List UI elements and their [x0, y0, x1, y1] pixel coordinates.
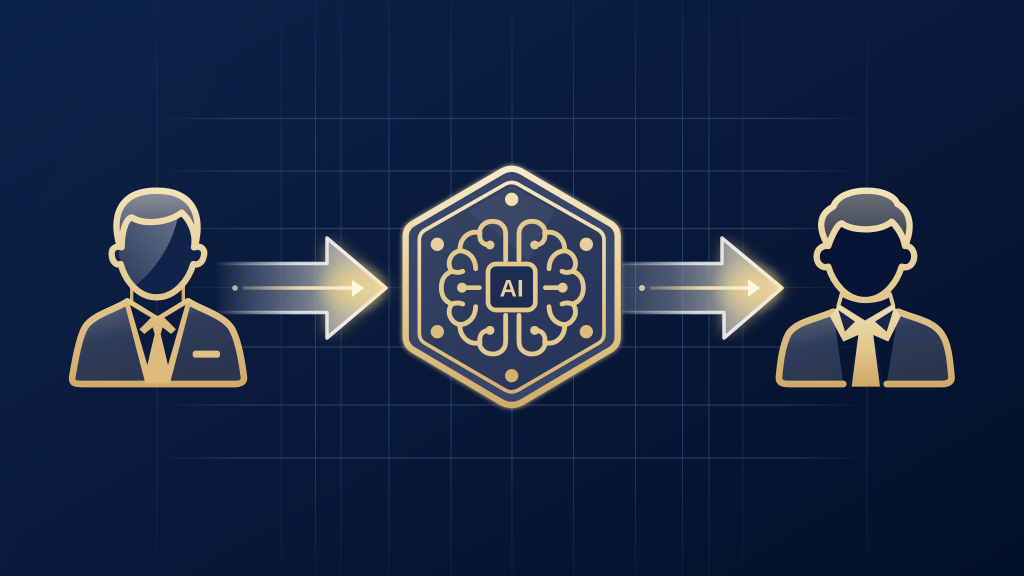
- hexagon outer ring: [406, 169, 618, 405]
- right person tie shadow: [848, 333, 884, 387]
- arrow body: [622, 238, 782, 338]
- arrow start dot: [639, 285, 645, 291]
- left person neck: [132, 283, 183, 302]
- left person pocket: [193, 351, 220, 358]
- left person shirt and tie: [124, 301, 191, 383]
- right person face: [817, 222, 914, 300]
- arrow start dot: [232, 285, 238, 291]
- arrow heat: [710, 258, 786, 318]
- AI chip: [488, 264, 535, 310]
- left person face: [112, 213, 204, 297]
- hexagon node dots: [431, 193, 593, 382]
- arrow outline: [215, 238, 386, 338]
- arrow: person to AI: [215, 238, 390, 338]
- brain circuit: [441, 221, 583, 354]
- right person neck: [838, 294, 893, 323]
- arrow inner line: [243, 286, 352, 290]
- left person body: [72, 301, 244, 384]
- hexagon shine: [468, 186, 555, 262]
- right person collar and tie: [830, 305, 901, 387]
- hexagon glow: [406, 169, 618, 405]
- grid lines: [157, 0, 867, 576]
- arrow inner line: [650, 286, 749, 290]
- arrow: AI to person: [622, 238, 786, 338]
- icon: left person in suit: [72, 191, 244, 384]
- left person hair: [117, 191, 197, 245]
- arrow glow: [327, 241, 388, 335]
- hexagon inner ring: [419, 182, 604, 392]
- arrow heat: [314, 258, 390, 318]
- right person body: [779, 312, 952, 384]
- icon: AI hexagon badge: [406, 169, 618, 405]
- AI label: AI: [500, 275, 524, 302]
- arrow inner head: [748, 279, 760, 297]
- arrow inner head: [352, 280, 364, 297]
- arrow glow: [724, 241, 784, 335]
- arrow outline: [622, 238, 782, 338]
- icon: right person with tie: [779, 191, 952, 387]
- arrow body: [215, 238, 386, 338]
- right person hair: [821, 191, 910, 246]
